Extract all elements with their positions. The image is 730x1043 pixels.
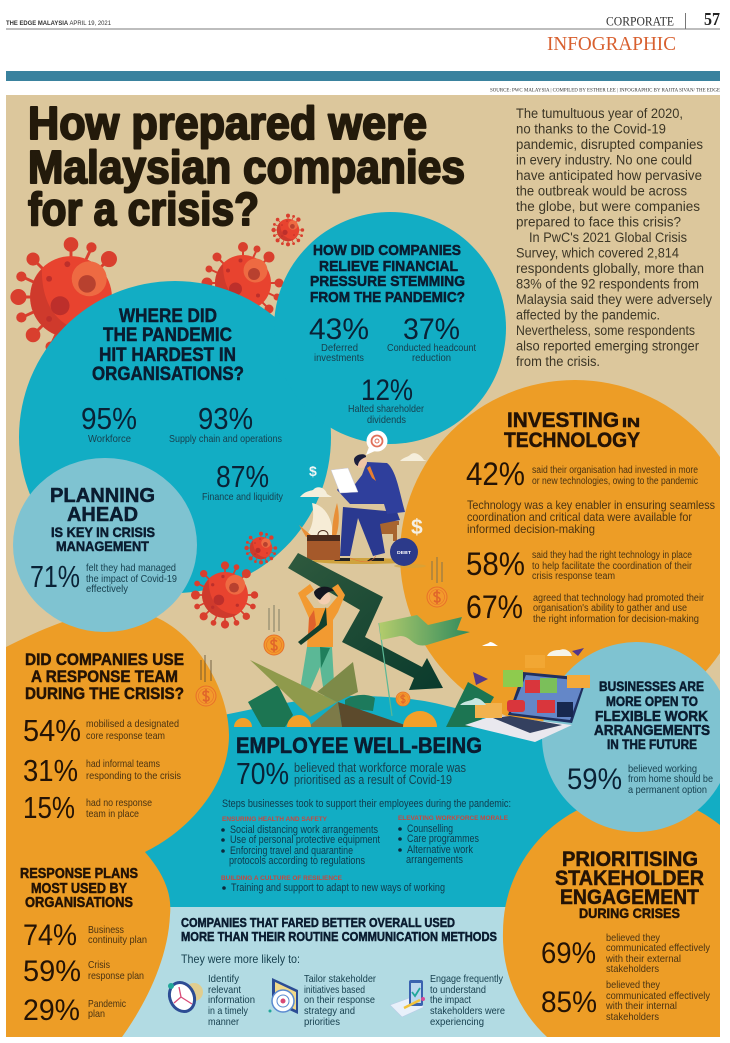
heading: BUSINESSES ARE	[599, 679, 704, 694]
stat: halted dividends	[348, 374, 424, 426]
title: Malaysian companies	[28, 141, 465, 193]
stat: supply chain: 93%	[198, 401, 253, 436]
stat: 70 percent: 70%	[236, 756, 289, 791]
briefcase	[307, 530, 340, 560]
list: culture of resilience: Training and support to adapt to new ways of working	[231, 882, 445, 894]
text: identify information: information	[208, 994, 255, 1006]
heading: IS KEY IN CRISIS	[51, 524, 155, 540]
intro text: 83% of the 92 respondents from	[516, 276, 699, 292]
stat: 31 percent: had informal teams	[86, 758, 160, 770]
teal sea and employee background	[120, 696, 720, 908]
icon: clock	[165, 978, 203, 1016]
paper plane	[572, 648, 584, 656]
text: engage frequently	[430, 973, 505, 1028]
stat: supply chain	[169, 401, 282, 445]
stat: 59 percent: response plan	[88, 970, 144, 982]
stat: workforce: 95%	[81, 401, 137, 436]
heading: ORGANISATIONS	[25, 895, 133, 911]
stat: 71 percent: felt they had managed	[86, 562, 176, 574]
panel: planning ahead	[13, 458, 197, 632]
text: identify information	[208, 973, 255, 1028]
heading: WHERE DID	[119, 306, 217, 327]
heading	[555, 848, 704, 921]
illustration: laptop	[460, 642, 590, 742]
illustration: sinking paper boats and money	[234, 660, 494, 727]
heading: STAKEHOLDER	[555, 867, 704, 890]
heading: PLANNING	[50, 485, 155, 507]
heading: AHEAD	[67, 504, 138, 526]
stat: supply chain: Supply chain and operations	[169, 433, 282, 445]
intro text: respondents globally, more than	[516, 261, 704, 276]
list: health and safety: Enforcing travel and quarantine	[230, 845, 353, 857]
intro text: no thanks to the Covid-19	[516, 122, 666, 136]
stat: 69 percent: with their external	[605, 953, 681, 965]
heading: PRESSURE STEMMING	[310, 273, 465, 290]
intro text: also reported emerging stronger	[516, 338, 699, 354]
stat: 67 percent: the right information for decision-making	[533, 614, 699, 625]
stat: 67 percent: 67%	[466, 589, 523, 625]
heading: ARRANGEMENTS	[594, 722, 710, 739]
intro text: Nevertheless, some respondents	[516, 323, 695, 338]
boat left	[250, 660, 337, 717]
stat: 58 percent: crisis response team	[532, 571, 615, 582]
coin left	[264, 635, 284, 655]
panel: where did the pandemic hit	[19, 281, 331, 593]
icon: small virus top	[272, 214, 304, 246]
paragraph: technology enabler: informed decision-making	[467, 522, 595, 536]
bag	[345, 695, 375, 711]
heading	[20, 866, 138, 911]
cloud	[400, 453, 427, 461]
paragraph: technology enabler	[467, 498, 715, 536]
list: workforce morale: Alternative work	[407, 844, 473, 856]
stat: 29 percent	[23, 994, 126, 1027]
bank note left	[248, 685, 293, 727]
panel: flexible work arrangements	[542, 642, 720, 832]
stat: deferred investments: investments	[314, 352, 364, 364]
stat: 15 percent: 15%	[23, 790, 75, 825]
icon: target	[268, 978, 298, 1014]
stat: deferred investments	[309, 313, 369, 364]
panel: investing in technology	[400, 380, 730, 730]
intro text: affected by the pandemic.	[516, 308, 660, 322]
panel: left orange blob	[6, 610, 229, 1037]
stat: 58 percent: said they had the right technology in place	[532, 550, 692, 561]
stat: workforce: Workforce	[88, 433, 131, 445]
illustration: falling coins	[264, 557, 447, 655]
intro text: in every industry. No one could	[516, 152, 692, 168]
stat: halted dividends: 12%	[361, 374, 413, 407]
text: identify information: manner	[208, 1016, 239, 1028]
heading: COMPANIES THAT FARED BETTER OVERALL USED	[181, 916, 455, 930]
stat: 71 percent: effectively	[86, 583, 129, 595]
stat: 54 percent: 54%	[23, 713, 81, 748]
heading	[50, 485, 155, 554]
stat: 67 percent: agreed that technology had promoted their	[533, 593, 705, 604]
title	[28, 97, 465, 235]
stat: 71 percent: 71%	[30, 559, 80, 594]
heading: RESPONSE PLANS	[20, 866, 138, 882]
text: identify information: Identify	[208, 973, 240, 985]
list: workforce morale: Care programmes	[407, 833, 479, 845]
stat: 69 percent: communicated effectively	[606, 942, 711, 954]
masthead: THE EDGE MALAYSIA APRIL 19, 2021	[6, 21, 112, 27]
stat: 67 percent	[466, 589, 705, 625]
stat: 59 percent: Crisis	[88, 959, 110, 971]
app tiles	[525, 680, 540, 693]
text: engage frequently: to understand	[430, 984, 486, 996]
panel: communication methods	[165, 916, 505, 1028]
heading	[25, 651, 184, 703]
blue band	[6, 71, 720, 81]
illustration: green downward arrow	[288, 553, 443, 690]
stat: 42 percent: 42%	[466, 456, 525, 492]
list: workforce morale	[398, 815, 509, 866]
stat: 29 percent: Pandemic	[88, 998, 126, 1010]
stat: 59 percent: from home should be	[628, 773, 713, 785]
icon: dollar sign: $	[411, 516, 423, 539]
stat: 69 percent: 69%	[541, 937, 596, 970]
list: health and safety	[221, 816, 380, 867]
stat: 71 percent: the impact of Covid-19	[86, 573, 177, 585]
stat: 85 percent: with their internal	[605, 1000, 677, 1012]
text: tailor initiatives: priorities	[304, 1016, 340, 1028]
icon: dollar sign: $	[309, 463, 317, 479]
text: engage frequently: the impact	[430, 994, 471, 1006]
intro text: The tumultuous year of 2020,	[516, 106, 683, 121]
panel: employee well-being	[221, 733, 511, 894]
stat: 59 percent: 59%	[567, 763, 622, 796]
list: workforce morale: Counselling	[407, 823, 453, 835]
stat: 15 percent: had no response	[86, 797, 152, 809]
icon: phone and checklist	[390, 980, 425, 1017]
icon: large virus	[12, 239, 129, 355]
stat: 70 percent	[236, 756, 466, 791]
heading: PRIORITISING	[562, 848, 698, 871]
intro text: pandemic, disrupted companies	[516, 137, 703, 152]
stat: 85 percent	[541, 979, 711, 1023]
steps intro: Steps businesses took to support their employees during the pandemic:	[222, 798, 511, 810]
list: culture of resilience	[221, 875, 445, 894]
illustration: seated businessman with debt	[299, 430, 427, 568]
heading: FROM THE PANDEMIC?	[310, 289, 465, 306]
text: engage frequently: experiencing	[430, 1016, 484, 1028]
stat: 74 percent: continuity plan	[88, 934, 147, 946]
panel: response plans	[20, 866, 147, 1027]
stat: 59 percent: a permanent option	[628, 784, 707, 796]
illustration: person holding arrow	[298, 584, 345, 700]
intro text	[516, 106, 712, 369]
text: identify information: in a timely	[208, 1005, 249, 1017]
heading: DURING CRISES	[579, 905, 680, 921]
list: workforce morale: ELEVATING WORKFORCE MORALE	[398, 815, 509, 822]
stat: 31 percent	[23, 753, 181, 788]
stat: 58 percent	[466, 546, 693, 582]
source line: SOURCE: PWC MALAYSIA | COMPILED BY ESTHER LEE | INFOGRAPHIC BY RAJITA SIVAN/ THE EDGE	[490, 88, 720, 94]
stat: 85 percent: believed they	[606, 979, 661, 991]
stat: 70 percent: prioritised as a result of Covid-19	[294, 773, 452, 787]
heading: DID COMPANIES USE	[25, 651, 184, 669]
heading: DURING THE CRISIS?	[25, 685, 184, 703]
cloud	[482, 642, 498, 646]
text: tailor initiatives: on their response	[304, 994, 375, 1006]
heading: FLEXIBLE WORK	[595, 708, 708, 725]
heading: MORE THAN THEIR ROUTINE COMMUNICATION METHODS	[181, 930, 497, 944]
heading: INVESTING	[507, 409, 619, 432]
heading: EMPLOYEE WELL-BEING	[236, 733, 482, 758]
intro text: the globe, but were companies	[516, 199, 700, 214]
illustration: flag	[379, 615, 470, 716]
heading: A RESPONSE TEAM	[31, 668, 178, 686]
stat: headcount reduction	[387, 313, 476, 364]
stat: 29 percent: plan	[88, 1008, 105, 1020]
list: health and safety: Social distancing work arrangements	[230, 824, 378, 836]
stat: 42 percent: or new technologies, owing to the pandemic	[532, 476, 698, 487]
title: How prepared were	[28, 97, 427, 149]
stat: 74 percent	[23, 919, 147, 952]
stat: 67 percent: organisation's ability to gather and use	[533, 603, 687, 614]
stat: 69 percent	[541, 932, 711, 975]
stat: 70 percent: believed that workforce morale was	[294, 761, 466, 775]
debt ball: DEBT	[397, 550, 411, 555]
text: tailor initiatives	[304, 973, 376, 1028]
stat: 85 percent: communicated effectively	[606, 990, 711, 1002]
stat: 59 percent: believed working	[628, 763, 697, 775]
stat: halted dividends: dividends	[367, 414, 406, 426]
stat: deferred investments: Deferred	[321, 342, 358, 354]
stat: finance	[202, 459, 284, 503]
stat: 85 percent: stakeholders	[606, 1011, 659, 1023]
stat: 31 percent: responding to the crisis	[86, 770, 181, 782]
intro text: the outbreak would be across	[516, 184, 687, 198]
stat: 58 percent: to help facilitate the coordination of their	[532, 561, 693, 572]
subheading: They were more likely to:	[181, 952, 300, 966]
ground shadow	[312, 558, 412, 564]
heading	[92, 306, 244, 385]
list: culture of resilience: BUILDING A CULTURE OF RESILIENCE	[221, 875, 343, 882]
stat: 59 percent	[567, 763, 713, 796]
heading: TECHNOLOGY	[504, 429, 640, 452]
list: workforce morale: arrangements	[406, 854, 463, 866]
stat: headcount reduction: Conducted headcount	[387, 342, 476, 354]
stat: 42 percent	[466, 456, 698, 492]
heading: MANAGEMENT	[56, 538, 149, 554]
stat: 69 percent: stakeholders	[606, 963, 659, 975]
paragraph: technology enabler: coordination and critical data were available for	[467, 510, 692, 524]
coin right	[427, 587, 447, 607]
heading: IN THE FUTURE	[607, 737, 697, 752]
stat: 15 percent	[23, 790, 152, 825]
text: tailor initiatives: Tailor stakeholder	[304, 973, 376, 985]
intro text: Survey, which covered 2,814	[516, 246, 679, 260]
heading: ENGAGEMENT	[560, 886, 699, 909]
heading	[181, 916, 497, 944]
panel: prioritising stakeholder engagement	[503, 795, 720, 1037]
stat: finance: Finance and liquidity	[202, 491, 284, 503]
intro text: have anticipated how pervasive	[516, 168, 702, 183]
panel: response team	[23, 651, 184, 825]
icon: coin on orange	[196, 686, 216, 706]
cloud	[547, 649, 572, 656]
intro text: from the crisis.	[516, 354, 600, 369]
stat: 29 percent: 29%	[23, 994, 80, 1027]
heading	[594, 679, 710, 752]
section heading: INFOGRAPHIC	[547, 34, 676, 55]
stat: 54 percent: mobilised a designated	[86, 718, 179, 730]
stat: headcount reduction: reduction	[412, 352, 451, 364]
stat: 15 percent: team in place	[86, 808, 139, 820]
stat: halted dividends: Halted shareholder	[348, 403, 424, 415]
heading: THE PANDEMIC	[103, 325, 232, 346]
cloud	[460, 698, 486, 705]
text: engage frequently: Engage frequently	[430, 973, 504, 985]
text: tailor initiatives: strategy and	[304, 1005, 355, 1017]
speech bubble	[366, 430, 388, 455]
heading: RELIEVE FINANCIAL	[319, 258, 458, 275]
stat: 59 percent: 59%	[23, 955, 81, 988]
cloud	[300, 487, 332, 497]
text: engage frequently: stakeholders were	[430, 1005, 505, 1017]
page header	[6, 9, 720, 30]
heading: MORE OPEN TO	[606, 694, 698, 709]
stat: 54 percent	[23, 713, 179, 748]
section label: CORPORATE	[606, 14, 674, 28]
stat: headcount reduction: 37%	[403, 313, 460, 346]
text: tailor initiatives: initiatives based	[304, 984, 365, 996]
pale panel background	[100, 907, 720, 1037]
panel: financial pressure	[274, 212, 506, 444]
stat: 74 percent: Business	[88, 924, 124, 936]
stat: 71 percent	[30, 559, 177, 595]
page number: 57	[704, 9, 720, 29]
plant	[299, 503, 339, 537]
bank note right	[446, 682, 494, 727]
stool	[376, 521, 399, 541]
intro text: Malaysia said they were adversely	[516, 292, 712, 307]
icon: virus centre left	[192, 562, 257, 628]
stat: 58 percent: 58%	[466, 546, 525, 582]
text: identify information: relevant	[208, 984, 241, 996]
heading: MOST USED BY	[31, 881, 127, 897]
list: health and safety: ENSURING HEALTH AND SAFETY	[222, 816, 328, 823]
heading: HIT HARDEST IN	[99, 345, 236, 366]
heading: ORGANISATIONS?	[92, 364, 244, 385]
man	[331, 454, 405, 561]
stat: 85 percent: 85%	[541, 986, 597, 1019]
heading	[504, 409, 640, 452]
stat: deferred investments: 43%	[309, 313, 369, 346]
coins	[234, 711, 437, 727]
stat: 31 percent: 31%	[23, 753, 78, 788]
paper plane	[473, 672, 488, 685]
heading: HOW DID COMPANIES	[313, 242, 461, 259]
icon: medium virus	[202, 243, 282, 323]
icon: small virus centre	[245, 532, 277, 564]
stat: 74 percent: 74%	[23, 919, 77, 952]
title: for a crisis?	[28, 183, 259, 235]
stat: 69 percent: believed they	[606, 932, 661, 944]
heading	[310, 242, 465, 306]
stat: 59 percent	[23, 955, 144, 988]
intro text: prepared to face this crisis?	[516, 214, 681, 230]
chain	[350, 556, 376, 562]
heading: IN	[622, 415, 640, 430]
intro text: In PwC's 2021 Global Crisis	[529, 230, 687, 245]
list: health and safety: protocols according to regulations	[229, 855, 365, 867]
stat: 54 percent: core response team	[86, 730, 165, 742]
list: health and safety: Use of personal protective equipment	[230, 834, 380, 846]
stat: 42 percent: said their organisation had invested in more	[532, 465, 698, 476]
stat: finance: 87%	[216, 459, 269, 494]
